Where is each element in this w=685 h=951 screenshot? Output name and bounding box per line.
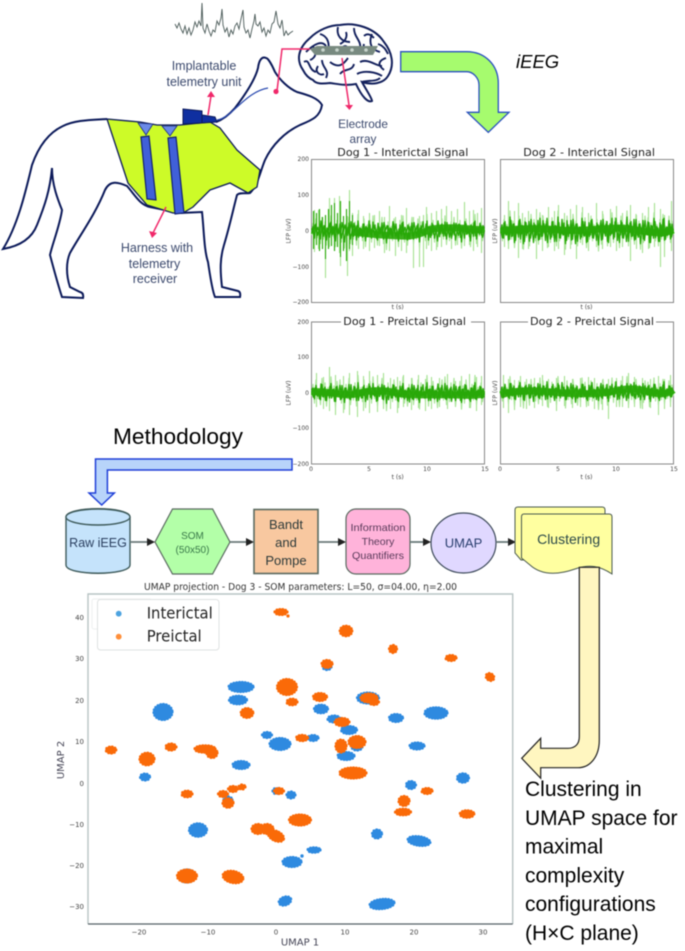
node: Clustering documents [515, 507, 612, 574]
node: Bandt and Pompe: Bandt [269, 517, 303, 532]
chart title: Dog 2 - Preictal Signal [530, 315, 654, 328]
bottom axis [88, 923, 513, 925]
brain sulci [304, 27, 388, 82]
signal trace [312, 367, 484, 417]
harness straps [141, 136, 184, 214]
y tick labels: −200 [293, 461, 309, 468]
y tick labels [69, 614, 84, 911]
text block: clustering description: complexity [525, 864, 625, 887]
label: harness with telemetry receiver: receiver [133, 272, 177, 286]
arrow: UMAP to clustering [496, 538, 516, 546]
dog outline [3, 57, 322, 298]
heading: iEEG: iEEG [516, 51, 559, 72]
node: Raw iEEG cylinder: Raw iEEG [69, 536, 127, 550]
y tick labels: 20 [75, 697, 84, 705]
harness [107, 119, 260, 213]
text block: clustering description: configurations [525, 893, 656, 916]
chart: Dog 2 interictal signal [492, 146, 674, 311]
x axis label: t (s) [580, 474, 593, 481]
chart title: Dog 1 - Interictal Signal [337, 146, 468, 159]
y tick labels: −200 [293, 299, 309, 306]
electrode contacts [323, 48, 366, 52]
node: Information Theory Quantifiers [346, 509, 410, 574]
chart: Dog 2 preictal signal [492, 315, 678, 481]
arrow: quantifiers to UMAP [410, 538, 431, 546]
chart title: Dog 2 - Interictal Signal [523, 146, 655, 159]
interictal clusters [140, 664, 468, 910]
x tick labels: 20 [410, 928, 418, 936]
label: electrode array: Electrode [338, 117, 388, 131]
x tick labels: 5 [556, 466, 560, 473]
y tick labels: −100 [293, 264, 309, 271]
x tick labels [498, 466, 678, 473]
label: implantable telemetry unit: Implantable [172, 59, 236, 73]
y tick labels: 200 [298, 319, 309, 326]
node: Clustering documents: Clustering [537, 531, 600, 547]
y tick labels [293, 156, 309, 306]
y tick labels: 100 [298, 354, 309, 361]
y tick labels: −100 [293, 425, 309, 432]
legend [92, 599, 219, 650]
node: Raw iEEG cylinder [66, 509, 130, 573]
legend: Interictal [147, 604, 213, 622]
x tick labels: 15 [481, 466, 489, 473]
chart: UMAP scatter plot [56, 594, 513, 948]
x tick labels: 10 [612, 466, 620, 473]
chart: Dog 1 preictal signal [286, 315, 489, 481]
node: SOM hexagon [155, 509, 230, 574]
node: Bandt and Pompe: Pompe [265, 553, 307, 568]
text block: clustering description: maximal [525, 836, 603, 859]
y tick labels: 0 [80, 780, 84, 788]
preictal clusters [106, 610, 495, 884]
implantable telemetry unit [183, 109, 217, 124]
y tick labels: 40 [75, 614, 84, 622]
y tick labels: 10 [75, 738, 84, 746]
label: harness with telemetry receiver: telemetry [129, 257, 181, 271]
heading: Methodology: Methodology [113, 424, 243, 449]
y axis title: UMAP 2 [56, 741, 67, 779]
arrow: SOM to Bandt and Pompe [230, 538, 254, 546]
y axis label: LFP (uV) [492, 381, 499, 405]
label: electrode array: array [350, 132, 377, 146]
y tick labels: 100 [298, 192, 309, 199]
node: UMAP circle: UMAP [445, 536, 482, 550]
chart: Dog 1 interictal signal [286, 146, 484, 311]
signal trace [500, 201, 674, 267]
x tick labels: −20 [132, 928, 146, 936]
y axis label: LFP (uV) [492, 219, 499, 243]
x tick labels: 5 [367, 466, 371, 473]
x tick labels: 0 [309, 466, 313, 473]
electrode array [310, 46, 378, 55]
y tick labels: −10 [69, 821, 84, 829]
y tick labels: 200 [298, 156, 309, 163]
text block: clustering description: (H×C plane) [525, 922, 639, 945]
node: Information Theory Quantifiers: Quantifiers [352, 550, 404, 562]
x tick labels: 10 [341, 928, 349, 936]
node: Information Theory Quantifiers: Information [350, 522, 406, 534]
node: SOM hexagon: SOM [181, 531, 204, 542]
arrow: blue methodology arrow [89, 459, 292, 505]
y tick labels: −20 [69, 862, 84, 870]
x tick labels: 15 [670, 466, 678, 473]
y tick labels: −30 [69, 903, 84, 911]
signal trace [500, 373, 674, 419]
x axis title: UMAP 1 [281, 938, 319, 948]
harness strap triangles [138, 123, 177, 136]
node: UMAP circle [431, 513, 496, 573]
label: implantable telemetry unit: telemetry unit [166, 75, 242, 89]
y tick labels [293, 319, 309, 468]
label: harness with telemetry receiver: Harness with [121, 241, 193, 255]
x tick labels: 10 [423, 466, 431, 473]
x axis label: t (s) [392, 474, 404, 481]
arrow: harness pointer [149, 207, 166, 238]
title background [528, 318, 656, 326]
pink lead from electrode to implant [273, 49, 310, 94]
text block: clustering description: UMAP space for [525, 807, 678, 830]
icon: top iEEG trace [175, 3, 293, 38]
implant wire [217, 88, 268, 120]
y tick labels: 0 [305, 228, 309, 235]
icon: dog with harness [3, 57, 322, 298]
y axis label: LFP (uV) [286, 381, 292, 405]
x tick labels: −10 [201, 928, 215, 936]
arrow: Bandt and Pompe to quantifiers [318, 538, 346, 546]
chart title: Dog 1 - Preictal Signal [343, 315, 466, 328]
y axis label: LFP (uV) [286, 219, 292, 243]
arrow: green iEEG arrow [401, 52, 509, 132]
node: SOM hexagon: (50x50) [176, 545, 209, 556]
plot frame [88, 594, 513, 924]
arrow: iEEG to SOM [130, 538, 155, 546]
x axis label: t (s) [580, 304, 593, 311]
arrow: yellow clustering arrow [522, 567, 599, 778]
brain outline [299, 24, 392, 101]
chart title: UMAP projection: UMAP projection - Dog 3 - SOM parameters: L=50, σ=04.00, η=2.00 [144, 582, 457, 593]
text block: clustering description: Clustering in [525, 778, 642, 801]
x tick labels [132, 928, 487, 936]
signal trace [312, 190, 484, 278]
x axis label: t (s) [392, 304, 404, 311]
node: Bandt and Pompe: and [275, 535, 297, 550]
x tick labels [309, 466, 489, 473]
node: Bandt and Pompe [254, 510, 318, 574]
x tick labels: 0 [274, 928, 278, 936]
arrow: telemetry unit pointer [207, 91, 215, 115]
legend: Preictal [147, 626, 202, 646]
arrow: electrode array pointer [342, 58, 353, 110]
y tick labels: 30 [75, 655, 84, 663]
node: Information Theory Quantifiers: Theory [362, 536, 395, 548]
flowchart [66, 507, 612, 574]
y tick labels: 0 [305, 390, 309, 397]
icon: brain with electrode array [299, 24, 392, 101]
x tick labels: 0 [498, 466, 502, 473]
x tick labels: 30 [479, 928, 487, 936]
title background [341, 318, 471, 326]
